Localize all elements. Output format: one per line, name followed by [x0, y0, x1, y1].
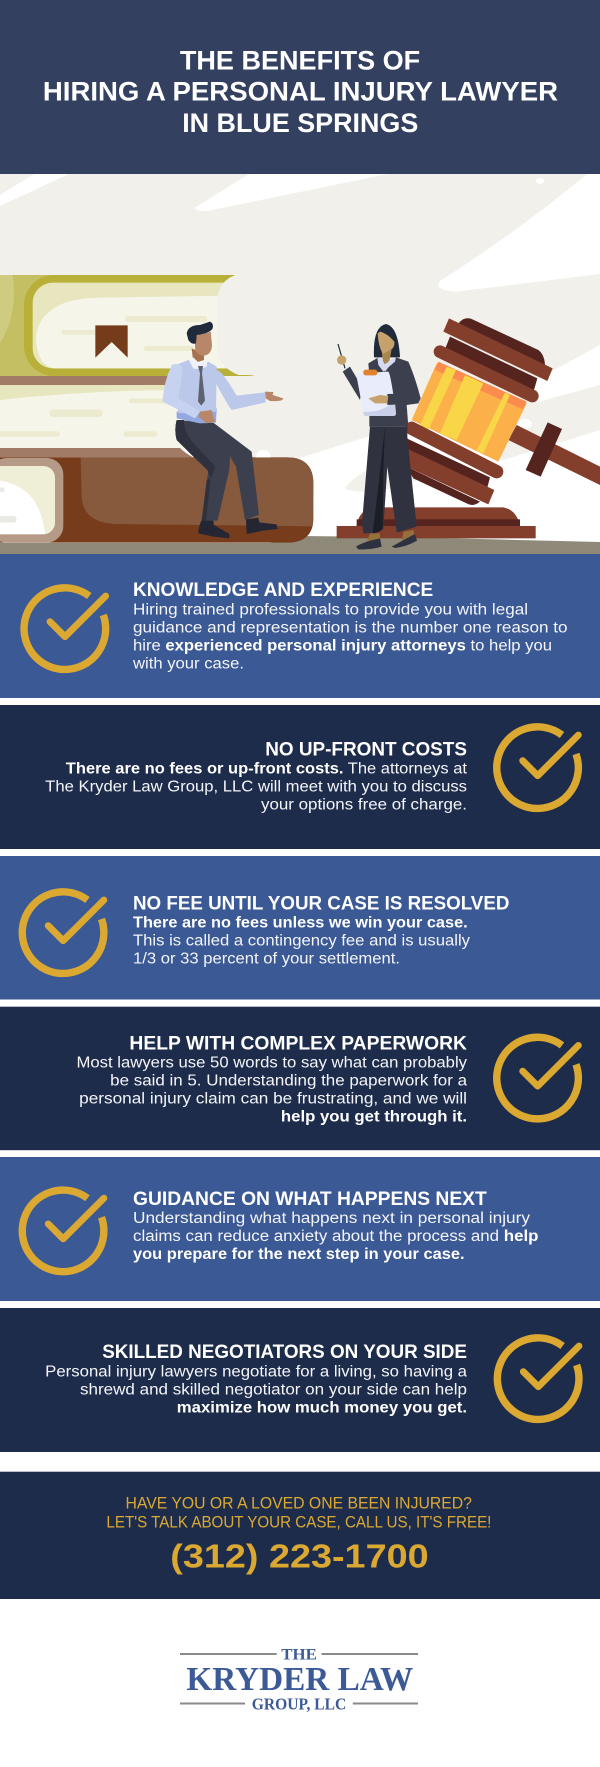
- books stack: [0, 274, 313, 543]
- heading: NO UP-FRONT COSTS: [265, 738, 467, 760]
- panel: help with complex paperwork: [0, 1007, 600, 1150]
- icon: check mark: [22, 1190, 104, 1272]
- text block: 1/3 or 33 percent of your settlement.: [133, 950, 400, 967]
- icon: check mark: [497, 1338, 579, 1419]
- icon: bookmark: [95, 325, 128, 358]
- panel: knowledge and experience: [0, 554, 600, 698]
- icon: gavel and sound block: [337, 318, 600, 538]
- icon: check mark: [497, 727, 578, 808]
- text block: There are no fees unless we win your case.: [133, 914, 468, 931]
- title: THE BENEFITS OF: [180, 46, 420, 76]
- text block: Hiring trained professionals to provide you with legal: [133, 602, 528, 618]
- heading: HELP WITH COMPLEX PAPERWORK: [129, 1032, 467, 1054]
- callout text: HAVE YOU OR A LOVED ONE BEEN INJURED?: [126, 1494, 472, 1513]
- logo: The Kryder Law Group, LLC: THE: [281, 1647, 317, 1664]
- callout text: [106, 1494, 491, 1532]
- panel: skilled negotiators on your side: [0, 1308, 600, 1452]
- title: [43, 46, 558, 138]
- title: IN BLUE SPRINGS: [182, 108, 418, 138]
- text block: maximize how much money you get.: [177, 1400, 467, 1417]
- text block: help you get through it.: [281, 1109, 467, 1126]
- header banner: [0, 0, 600, 174]
- heading: NO FEE UNTIL YOUR CASE IS RESOLVED: [133, 892, 509, 914]
- logo: The Kryder Law Group, LLC: [180, 1647, 418, 1713]
- heading: GUIDANCE ON WHAT HAPPENS NEXT: [133, 1188, 487, 1210]
- logo: The Kryder Law Group, LLC: GROUP, LLC: [252, 1694, 346, 1713]
- text block: with your case.: [132, 656, 244, 672]
- figure: male lawyer sitting: [163, 322, 283, 538]
- text block: guidance and representation is the number one reason to: [133, 620, 568, 636]
- heading: KNOWLEDGE AND EXPERIENCE: [133, 579, 433, 601]
- title: HIRING A PERSONAL INJURY LAWYER: [43, 77, 558, 107]
- phone number: (312) 223-1700: [170, 1538, 429, 1575]
- icon: check mark: [497, 1037, 578, 1119]
- heading: SKILLED NEGOTIATORS ON YOUR SIDE: [102, 1341, 467, 1363]
- text block: This is called a contingency fee and is usually: [133, 932, 470, 949]
- illustration: lawyers with books and gavel: [0, 174, 600, 554]
- text block: [45, 1364, 467, 1417]
- text block: [132, 602, 568, 672]
- panel: no up-front costs: [0, 705, 600, 849]
- callout text: LET'S TALK ABOUT YOUR CASE, CALL US, IT'S FREE!: [106, 1513, 491, 1532]
- text block: your options free of charge.: [261, 796, 467, 813]
- text block: hire experienced personal injury attorneys to help you: [133, 638, 552, 654]
- text block: There are no fees or up-front costs. The attorneys at: [66, 760, 468, 777]
- text block: [133, 914, 470, 967]
- text block: Personal injury lawyers negotiate for a living, so having a: [45, 1364, 467, 1381]
- panel: no fee until your case is resolved: [0, 856, 600, 1000]
- icon: check mark: [22, 892, 104, 973]
- text block: shrewd and skilled negotiator on your side can help: [80, 1382, 467, 1399]
- text block: Most lawyers use 50 words to say what can probably: [76, 1055, 467, 1072]
- text block: [45, 760, 468, 813]
- logo: The Kryder Law Group, LLC: KRYDER LAW: [186, 1661, 413, 1698]
- text block: [76, 1055, 467, 1126]
- text block: be said in 5. Understanding the paperwork for a: [110, 1073, 467, 1090]
- panel: guidance on what happens next: [0, 1157, 600, 1301]
- text block: The Kryder Law Group, LLC will meet with you to discuss: [45, 778, 467, 795]
- text block: you prepare for the next step in your case.: [133, 1246, 465, 1263]
- text block: claims can reduce anxiety about the process and help: [133, 1228, 538, 1245]
- panel: call to action: [0, 1472, 600, 1599]
- text block: Understanding what happens next in personal injury: [133, 1210, 530, 1227]
- text block: personal injury claim can be frustrating, and we will: [79, 1091, 467, 1108]
- figure: female lawyer with clipboard: [337, 324, 421, 549]
- icon: check mark: [24, 588, 106, 669]
- text block: [133, 1210, 538, 1263]
